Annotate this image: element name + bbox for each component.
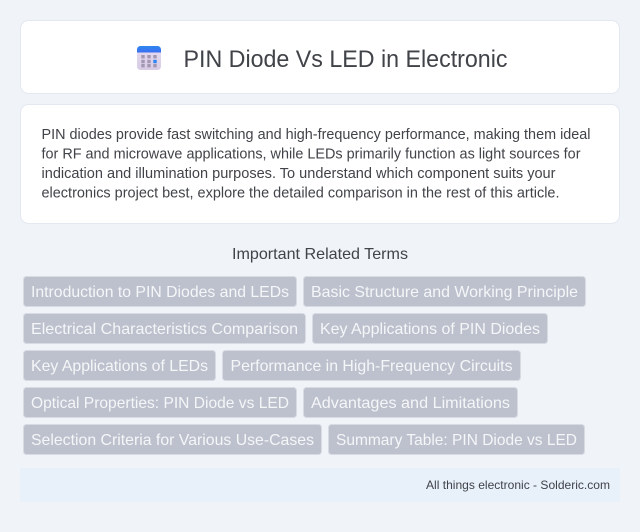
tag xyxy=(222,350,520,380)
panel: introduction xyxy=(20,104,620,224)
tag: Performance in High-Frequency Circuits xyxy=(230,358,512,375)
tag: Summary Table: PIN Diode vs LED xyxy=(336,432,577,449)
tag xyxy=(24,388,296,418)
tag: Key Applications of LEDs xyxy=(31,358,208,375)
tag xyxy=(24,276,296,306)
tag xyxy=(312,314,548,344)
heading: important related terms: Important Related Terms xyxy=(232,246,408,263)
tag: Advantages and Limitations xyxy=(311,395,510,412)
tag xyxy=(24,314,306,344)
intro text: electronics project best, explore the detailed comparison in the rest of this article. xyxy=(42,184,560,202)
tag: Selection Criteria for Various Use-Cases xyxy=(31,432,314,449)
icon: calendar xyxy=(137,46,161,70)
intro text: indication and illumination purposes. To understand which component suits your xyxy=(42,165,556,182)
intro text: PIN diodes provide fast switching and high-frequency performance, making them ideal xyxy=(42,126,590,143)
tag xyxy=(304,388,518,418)
tag: Introduction to PIN Diodes and LEDs xyxy=(31,284,289,301)
tag list xyxy=(24,276,586,454)
footer xyxy=(20,468,620,502)
tag xyxy=(304,276,586,306)
tag xyxy=(328,424,584,454)
tag xyxy=(24,350,216,380)
title: PIN Diode Vs LED in Electronic xyxy=(184,46,508,73)
intro text: for RF and microwave applications, while LEDs primarily function as light sources for xyxy=(42,146,580,162)
tag: Basic Structure and Working Principle xyxy=(311,284,578,301)
tag: Key Applications of PIN Diodes xyxy=(320,321,540,338)
footer: All things electronic - Solderic.com xyxy=(426,478,610,492)
intro text xyxy=(42,126,590,202)
tag xyxy=(24,424,322,454)
panel: title header xyxy=(20,20,620,94)
tag: Electrical Characteristics Comparison xyxy=(31,321,298,338)
tag: Optical Properties: PIN Diode vs LED xyxy=(31,395,289,412)
